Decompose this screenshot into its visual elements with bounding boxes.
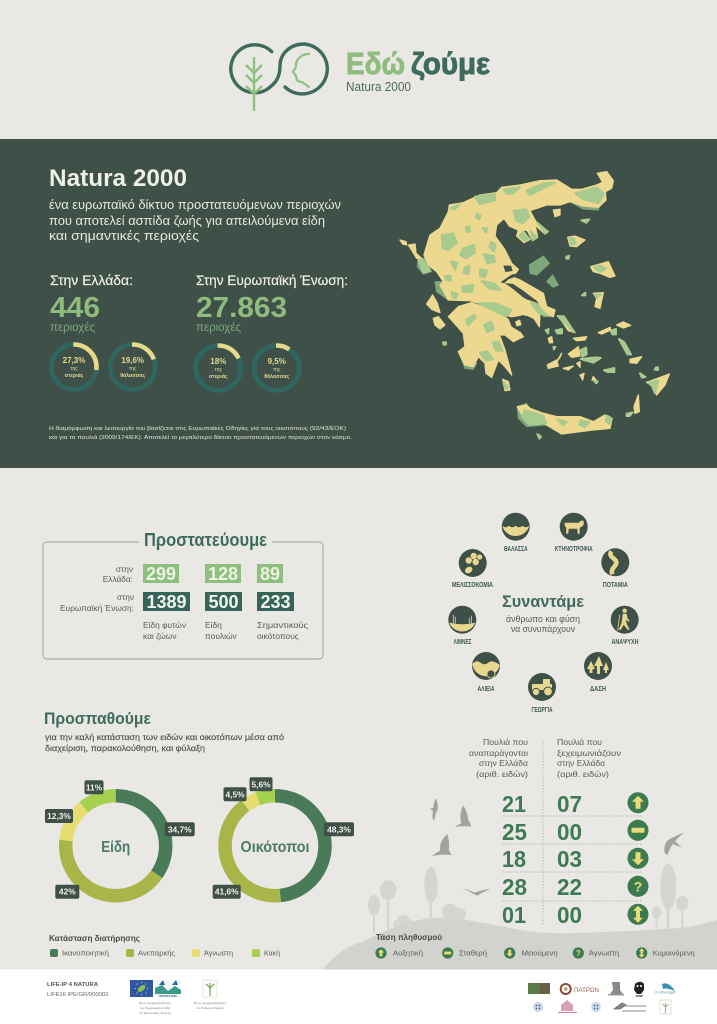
intro text: ένα ευρωπαϊκό δίκτυο προστατευόμενων περιοχών — [49, 198, 341, 212]
ring: Greece land 27,3%: της — [70, 366, 78, 372]
legend: conservation status: Κατάσταση διατήρησης — [49, 933, 141, 943]
ring: EU sea 9,5%: 9,5% — [268, 357, 286, 366]
project reference: LIFE16 IPE/GR/000002. — [47, 992, 110, 998]
numbers: breeding: 18 — [502, 846, 526, 872]
legend: conservation status: Άγνωστη — [204, 948, 233, 958]
partner logos: ΠΑΤΡΩΝ — [574, 987, 599, 994]
description: διαχείριση, παρακολούθηση, και φύλαξη — [45, 743, 205, 753]
column header: breeding birds: στην Ελλάδα — [479, 758, 528, 768]
donut chart: habitats: 4,5% — [225, 789, 245, 799]
project reference: LIFE-IP 4 NATURA — [47, 982, 98, 988]
legend: population trend: Άγνωστη — [589, 949, 619, 958]
heading: Προσπαθούμε — [44, 709, 151, 728]
heading: Προστατεύουμε — [144, 530, 267, 550]
legend: population trend: Σταθερή — [459, 949, 487, 958]
ring: Greece sea 19,6%: 19,6% — [121, 356, 144, 365]
stat: European Union: 27.863 — [196, 292, 287, 324]
column header: breeding birds — [469, 737, 528, 779]
values: Greece: 89 — [260, 564, 280, 584]
legend: population trend: Κυμαινόμενη — [653, 949, 695, 958]
subheading: άνθρωπο και φύση — [506, 614, 580, 624]
numbers: breeding — [502, 791, 527, 928]
partner logos: Ornithologiki — [654, 990, 676, 994]
icon labels: ΜΕΛΙΣΣΟΚΟΜΙΑ — [452, 580, 493, 589]
description — [45, 732, 284, 753]
icon labels: ΔΑΣΗ — [590, 684, 606, 693]
numbers: wintering: 03 — [557, 846, 582, 872]
panel: Συναντάμε — [448, 513, 639, 714]
caption: Green Fund: του Πράσινου Ταμείου — [196, 1006, 224, 1010]
legend: population trend: ? — [576, 949, 581, 958]
values: Greece: 128 — [208, 564, 238, 584]
icon: beekeeping — [459, 549, 487, 577]
footnote: Η διαμόρφωση και λειτουργία του βασίζεται στις Ευρωπαϊκές Οδηγίες για τους οικοτόπους (92/43/ΕΟΚ) — [49, 425, 346, 432]
panel: Natura 2000 dark band — [0, 139, 717, 468]
trend icon: stable — [628, 820, 648, 841]
icon: rivers — [601, 548, 629, 576]
donut chart: species: 11% — [86, 782, 103, 792]
ring: EU sea 9,5%: θάλασσας — [264, 374, 289, 380]
intro text: που αποτελεί ασπίδα ζωής για απειλούμενα είδη — [49, 214, 325, 228]
icon labels: ΑΝΑΨΥΧΗ — [612, 637, 638, 646]
logo wordmark — [346, 46, 490, 94]
values: European Union: 500 — [208, 592, 239, 612]
numbers: breeding: 01 — [502, 902, 526, 928]
row labels: στην — [116, 564, 133, 574]
icon labels: ΛΙΜΝΕΣ — [454, 637, 472, 646]
caption: Green Fund — [194, 1001, 226, 1010]
caption: LIFE programme: του Προγράμματος LIFE — [140, 1006, 170, 1010]
ring: Greece sea 19,6% — [110, 344, 155, 390]
icon: forests — [584, 652, 612, 680]
light green protected areas on land — [418, 183, 658, 439]
column header: wintering birds: Πουλιά που — [557, 737, 602, 747]
ring: Greece land 27,3%: 27,3% — [63, 356, 85, 365]
trend icon: unknown: ? — [634, 878, 642, 894]
icon: fishing — [472, 652, 500, 680]
panel: bird population table — [469, 737, 648, 928]
values: European Union: 1389 — [146, 592, 187, 612]
description: για την καλή κατάσταση των ειδών και οικοτόπων μέσα από — [45, 732, 284, 742]
legend: population trend: Τάση πληθυσμού — [376, 932, 442, 942]
stat: Greece — [50, 272, 133, 334]
ring: Greece sea 19,6%: της — [129, 366, 137, 372]
icon: lakes — [448, 606, 476, 634]
stat: Greece: περιοχές — [50, 320, 95, 334]
intro text — [49, 198, 341, 243]
legend: population trend — [375, 932, 695, 959]
values: European Union — [143, 592, 294, 612]
stat: European Union: περιοχές — [196, 320, 241, 334]
column header: wintering birds: ξεχειμωνιάζουν — [557, 748, 621, 758]
donut chart: habitats: 5,6% — [251, 779, 271, 789]
donut chart: species: 34,7% — [168, 824, 192, 834]
values: European Union: 233 — [260, 592, 291, 612]
ring: EU land 18%: στεριάς — [209, 374, 228, 380]
partner logos — [528, 982, 676, 1014]
donut chart: habitats: 41,6% — [215, 887, 239, 897]
legend: population trend: Μειούμενη — [522, 949, 558, 958]
caption: Green Fund: Με τη συγχρηματοδότηση — [194, 1001, 226, 1005]
stat: European Union — [196, 272, 348, 334]
ring: EU land 18%: της — [215, 367, 223, 373]
numbers: wintering: 07 — [557, 791, 582, 817]
map of Greece — [400, 172, 669, 439]
column captions: Είδη φυτών — [143, 620, 186, 630]
donut chart: habitats — [213, 777, 354, 899]
column header: wintering birds — [557, 737, 621, 779]
row labels — [60, 564, 134, 613]
column captions: οικότοπους — [257, 631, 299, 641]
panel: Προσπαθούμε — [44, 709, 354, 958]
numbers: wintering — [557, 791, 582, 928]
icon labels: ΑΛΙΕΙΑ — [478, 684, 495, 693]
sea protected zones — [417, 200, 658, 427]
mainland and islands, land base — [400, 172, 669, 434]
row labels: στην — [117, 592, 134, 602]
caption: LIFE programme: της Ευρωπαϊκής Ένωσης — [139, 1011, 171, 1015]
logo: EU LIFE — [130, 980, 153, 997]
footnote — [49, 425, 352, 441]
numbers: wintering: 22 — [557, 874, 582, 900]
numbers: breeding: 28 — [502, 874, 527, 900]
table grid — [502, 740, 643, 925]
ring: Greece land 27,3% — [52, 344, 96, 390]
ring: EU land 18%: 18% — [210, 357, 226, 366]
ring: EU sea 9,5%: της — [273, 367, 281, 373]
ring: EU sea 9,5% — [254, 346, 299, 390]
dark inlets — [501, 266, 539, 332]
column header: breeding birds: Πουλιά που — [483, 737, 528, 747]
footnote: και για τα πουλιά (2009/174/ΕΚ). Αποτελεί το μεγαλύτερο δίκτυο προστατευόμενων περιοχών στον κόσμο. — [49, 434, 352, 441]
panel: Προστατεύουμε — [43, 530, 323, 659]
icon labels — [452, 544, 638, 714]
logo wordmark: ζούμε — [411, 46, 490, 81]
legend: conservation status — [49, 933, 280, 958]
ring: Greece sea 19,6%: θάλασσας — [120, 373, 145, 379]
project reference — [47, 982, 110, 998]
icon: sea — [502, 513, 530, 541]
birds — [429, 798, 684, 896]
column header: wintering birds: στην Ελλάδα — [557, 758, 605, 768]
donut chart: species — [45, 780, 195, 899]
logo: Natura 2000: NATURA 2000 — [159, 994, 177, 998]
numbers: breeding: 21 — [502, 791, 526, 817]
legend: population trend: Αυξητική — [393, 949, 423, 958]
illustration: hills, trees and birds — [322, 798, 717, 970]
heading: Συναντάμε — [502, 592, 584, 611]
partner logos: WWF — [636, 994, 643, 998]
logo — [231, 44, 490, 111]
legend: conservation status: Ικανοποιητική — [62, 948, 109, 958]
frame — [43, 542, 323, 659]
column header: wintering birds: (αριθ. ειδών) — [557, 769, 609, 779]
donut chart: species: Είδη — [101, 839, 130, 856]
logo mark: intertwined circles with tree and face — [231, 44, 327, 111]
subheading — [506, 614, 580, 634]
column captions — [143, 620, 308, 641]
column captions: και ζώων — [143, 631, 177, 641]
column captions: πουλιών — [205, 631, 237, 641]
legend: conservation status: Ανεπαρκής — [138, 948, 175, 958]
hill — [322, 918, 717, 970]
icon: agriculture tractor — [528, 673, 556, 701]
values: Greece — [143, 564, 283, 584]
logo: Green Fund — [203, 980, 217, 997]
ring: EU land 18% — [196, 346, 241, 390]
donut chart: habitats: 48,3% — [327, 824, 351, 834]
caption: LIFE programme — [139, 1001, 171, 1015]
footer — [0, 970, 717, 1024]
logo: Natura 2000 — [155, 980, 181, 998]
donut chart: habitats: Οικότοποι — [240, 839, 310, 856]
row labels: Ελλάδα: — [103, 574, 133, 584]
trend icon: increasing — [628, 792, 648, 813]
trees — [368, 863, 689, 933]
trend icon: decreasing — [628, 848, 648, 869]
icon: recreation hiker — [611, 606, 639, 634]
caption: LIFE programme: Με τη συγχρηματοδότηση — [139, 1001, 171, 1005]
stat: Greece: Στην Ελλάδα: — [50, 272, 133, 288]
donut chart: species: 42% — [59, 887, 76, 897]
legend: conservation status: Κακή — [264, 948, 280, 958]
icon labels: ΠΟΤΑΜΙΑ — [603, 580, 628, 589]
icon labels: ΘΑΛΑΣΣΑ — [504, 544, 528, 553]
subheading: να συνυπάρχουν — [511, 624, 575, 634]
stat: Greece: 446 — [50, 292, 100, 324]
icon labels: ΓΕΩΡΓΙΑ — [532, 705, 553, 714]
logo wordmark: Εδώ — [346, 46, 405, 81]
column header: breeding birds: αναπαράγονται — [469, 748, 528, 758]
ring: Greece land 27,3%: στεριάς — [65, 373, 84, 379]
column header: breeding birds: (αριθ. ειδών) — [476, 769, 528, 779]
trend icon: unknown — [628, 876, 648, 897]
trend icon: fluctuating — [628, 904, 648, 925]
numbers: wintering: 00 — [557, 819, 582, 845]
donut chart: species: 12,3% — [47, 811, 71, 821]
column captions: Είδη — [205, 620, 222, 630]
numbers: wintering: 00 — [557, 902, 582, 928]
numbers: breeding: 25 — [502, 819, 527, 845]
logo wordmark: Natura 2000 — [346, 80, 411, 94]
icon labels: ΚΤΗΝΟΤΡΟΦΙΑ — [555, 544, 593, 553]
intro text: και σημαντικές περιοχές — [49, 229, 199, 243]
row labels: Ευρωπαϊκή Ένωση: — [60, 603, 134, 613]
stat: European Union: Στην Ευρωπαϊκή Ένωση: — [196, 272, 348, 288]
column captions: Σημαντικούς — [257, 620, 308, 630]
icon: livestock — [560, 513, 588, 541]
values: Greece: 299 — [146, 564, 176, 584]
heading: Natura 2000: Natura 2000 — [49, 165, 187, 192]
